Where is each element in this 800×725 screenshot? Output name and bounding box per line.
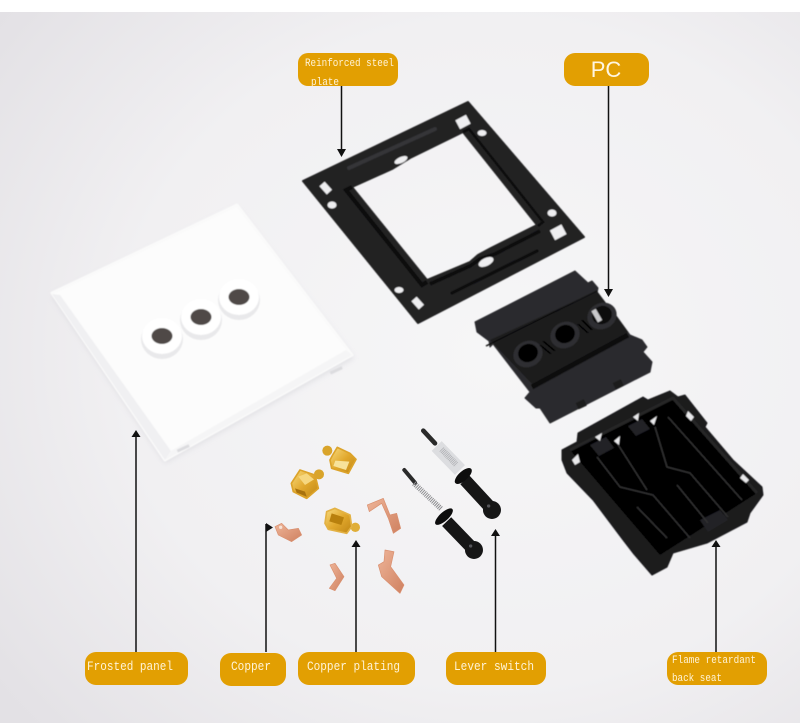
icon: frosted front panel [52, 205, 354, 463]
icon: brass terminal top [322, 446, 356, 473]
icon: button ring left [141, 318, 183, 359]
label: Frosted panel [85, 652, 188, 685]
plate holes [319, 115, 567, 309]
label: Reinforced steel plate: Reinforced steel [305, 58, 394, 70]
icon: copper pieces [275, 498, 404, 593]
arrow: lever switch [491, 529, 500, 652]
icon: lever with clear shaft [423, 431, 501, 519]
back seat notches [572, 411, 749, 483]
block tabs [576, 379, 624, 409]
back seat top blocks [590, 419, 728, 532]
back seat ribs [597, 417, 742, 538]
label: Copper plating [298, 652, 415, 685]
label: Reinforced steel plate: plate [311, 77, 339, 89]
icon: PC insulation block [475, 271, 652, 423]
label: Reinforced steel plate [298, 53, 398, 89]
icon: lever with spring [404, 470, 483, 559]
icon: brass and copper terminals [275, 431, 501, 593]
arrow: reinforced steel plate [337, 86, 346, 157]
label: Lever switch: Lever switch [454, 659, 534, 674]
label: Copper plating: Copper plating [307, 659, 400, 674]
block holes [509, 298, 621, 372]
icon: brass terminal left [291, 469, 324, 498]
icon: brass terminal bottom [325, 508, 360, 533]
arrow: copper [266, 523, 273, 652]
label: Copper: Copper [231, 659, 271, 674]
label: Lever switch [446, 652, 546, 685]
icon: reinforced steel plate [303, 102, 584, 323]
label: Flame retardant back seat: back seat [672, 673, 722, 685]
label: Copper [220, 653, 286, 686]
label: PC: PC [591, 57, 621, 82]
label: PC [564, 53, 649, 86]
arrow: copper plating [352, 540, 360, 652]
arrow: frosted panel [132, 430, 140, 652]
icon: button ring right [218, 279, 260, 320]
icon: button ring middle [180, 299, 222, 340]
arrow: PC [604, 86, 613, 297]
arrow: flame retardant back seat [712, 540, 720, 652]
label: Frosted panel: Frosted panel [87, 659, 173, 674]
label: Flame retardant back seat [667, 652, 767, 685]
icon: flame retardant back seat [562, 391, 763, 575]
label: Flame retardant back seat: Flame retardant [672, 655, 756, 667]
